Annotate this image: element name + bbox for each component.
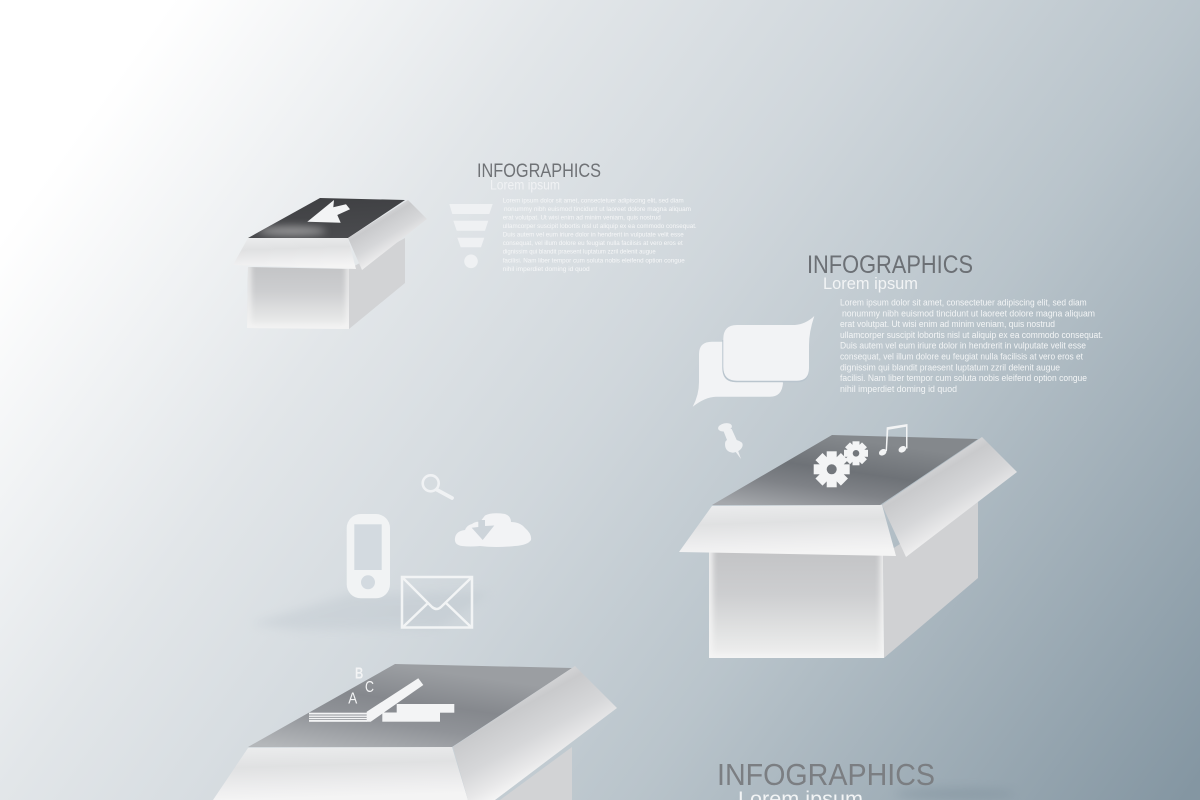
text block: medium: dignissim qui blandit praesent luptatum zzril delenit augue (840, 362, 1060, 372)
icon: speech bubbles (693, 316, 814, 407)
icon: open book (309, 678, 423, 722)
box front flap (213, 747, 468, 800)
icon: mobile phone (347, 514, 390, 598)
letters: A B C (348, 665, 374, 707)
subheading: small block: Lorem ipsum (490, 178, 560, 192)
box: medium right (679, 435, 1017, 658)
subheading: medium block: Lorem ipsum (823, 274, 918, 293)
floor shadow: bottom right (895, 788, 1015, 800)
letters: A B C: B (355, 665, 363, 682)
icon: small gear (844, 441, 868, 465)
box front flap (233, 238, 356, 269)
box side face (500, 747, 572, 800)
text block: small: nihil imperdiet doming id quod (503, 266, 590, 273)
text block: medium (840, 298, 1103, 394)
text block: small: Duis autem vel eum iriure dolor in hendrerit in vulputate velit esse (503, 231, 684, 238)
icon: funnel (449, 204, 493, 268)
box right flap (453, 666, 617, 800)
text block: small: Lorem ipsum dolor sit amet, consectetuer adipiscing elit, sed diam (503, 197, 684, 204)
icon: large gear (814, 451, 850, 487)
icon: music notes (878, 424, 908, 457)
box: large bottom (213, 664, 617, 800)
box open top (248, 198, 405, 238)
icon: push pin (717, 422, 743, 459)
box: small top-left (233, 198, 427, 329)
text block: small: nonummy nibh euismod tincidunt ut laoreet dolore magna aliquam (504, 206, 691, 213)
front bubble shadow edge (722, 340, 809, 382)
icon: magnifier (423, 475, 452, 498)
heading: small block title: INFOGRAPHICS (477, 160, 601, 182)
text block: small (503, 197, 697, 273)
text block: medium: nonummy nibh euismod tincidunt ut laoreet dolore magna aliquam (842, 308, 1095, 318)
text block: small: erat volutpat. Ut wisi enim ad minim veniam, quis nostrud (503, 215, 661, 222)
text block: medium: ullamcorper suscipit lobortis nisl ut aliquip ex ea commodo consequat. (840, 330, 1103, 340)
box front flap (679, 505, 896, 556)
letters: A B C: C (365, 679, 374, 696)
heading: medium block title: INFOGRAPHICS (807, 251, 973, 279)
text block: small: consequat, vel illum dolore eu feugiat nulla facilisis at vero eros et (503, 240, 683, 247)
floor shadow: icons group (250, 592, 490, 630)
text block: small: facilisi. Nam liber tempor cum soluta nobis eleifend option congue (503, 257, 685, 264)
back bubble (693, 342, 783, 407)
heading: large block title: INFOGRAPHICS (717, 757, 935, 792)
box side face (883, 493, 978, 658)
box right flap (882, 437, 1017, 557)
text block: small: dignissim qui blandit praesent luptatum zzril delenit augue (503, 248, 656, 255)
icon: envelope (402, 577, 472, 628)
text block: medium: Duis autem vel eum iriure dolor in hendrerit in vulputate velit esse (840, 341, 1086, 351)
letters: A B C: A (348, 690, 358, 707)
box open top (248, 664, 572, 747)
text block: medium: erat volutpat. Ut wisi enim ad minim veniam, quis nostrud (840, 319, 1055, 329)
box front face (247, 267, 349, 329)
text block: small: ullamcorper suscipit lobortis nisl ut aliquip ex ea commodo consequat. (503, 223, 697, 230)
box front face (709, 552, 884, 658)
icon: cloud download (455, 513, 531, 547)
text block: medium: nihil imperdiet doming id quod (840, 384, 957, 394)
text block: medium: consequat, vel illum dolore eu feugiat nulla facilisis at vero eros et (840, 352, 1083, 362)
text block: medium: facilisi. Nam liber tempor cum soluta nobis eleifend option congue (840, 373, 1087, 383)
text block: medium: Lorem ipsum dolor sit amet, consectetuer adipiscing elit, sed diam (840, 298, 1087, 308)
front bubble (723, 316, 814, 381)
box open top (712, 435, 978, 505)
box right flap (348, 200, 427, 270)
icon: cursor arrow (307, 200, 350, 223)
box side face (349, 238, 405, 329)
icon: stacked blocks (382, 704, 454, 722)
